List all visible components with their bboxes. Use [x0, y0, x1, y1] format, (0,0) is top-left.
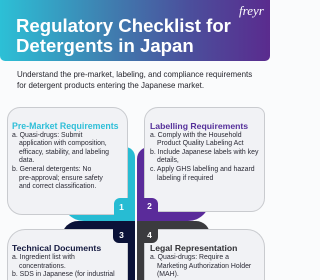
list [12, 132, 109, 190]
header banner [0, 0, 270, 61]
list: (MAH). [157, 271, 179, 278]
panel: pre-market requirements [7, 107, 135, 221]
list: efficacy, stability, and labeling [19, 149, 109, 156]
number 2 [143, 198, 158, 213]
list: application with composition, [19, 140, 107, 147]
list: a. Ingredient list with [12, 254, 75, 261]
list: a. Quasi-drugs: Submit [12, 132, 82, 138]
logo: freyr [239, 3, 264, 18]
card [144, 229, 265, 280]
card [7, 229, 128, 280]
teal backing shape [62, 147, 135, 221]
list [150, 254, 252, 278]
list: b. Include Japanese labels with key [150, 149, 258, 156]
list: a. Comply with the Household [150, 132, 242, 138]
card [144, 107, 265, 212]
number 3: 3 [119, 230, 124, 240]
title: Detergents in Japan [16, 35, 194, 56]
list [150, 132, 258, 182]
number 1: 1 [119, 202, 124, 212]
list: b. General detergents: No [12, 166, 91, 173]
list [12, 254, 115, 278]
title: Regulatory Checklist for [16, 15, 231, 36]
number 1 [114, 198, 129, 216]
intro text [17, 70, 252, 90]
number 2: 2 [147, 201, 152, 211]
list: b. SDS in Japanese (for industrial [12, 271, 115, 278]
number 4: 4 [147, 230, 152, 240]
intro text: for detergent products entering the Japanese market. [17, 80, 204, 90]
list: a. Quasi-drugs: Require a [150, 254, 229, 261]
list: data. [19, 157, 34, 164]
list: Product Quality Labeling Act [157, 140, 244, 147]
navy backing shape [62, 221, 135, 280]
title [16, 15, 231, 56]
number 3 [113, 228, 129, 243]
list: labeling if required [157, 175, 213, 182]
panel: technical documents [7, 221, 135, 280]
heading: Technical Documents [12, 242, 101, 252]
list: pre-approval; ensure safety [19, 175, 103, 182]
heading: Labelling Requirements [150, 121, 248, 131]
list: and correct classification. [19, 183, 96, 190]
list: concentrations. [19, 263, 66, 270]
list: c. Apply GHS labelling and hazard [150, 166, 255, 173]
panel: legal representation [137, 221, 265, 280]
card [7, 107, 128, 215]
grey backing shape [137, 221, 210, 280]
list: details, [157, 157, 179, 164]
list: Marketing Authorization Holder [157, 263, 251, 270]
panel: labelling requirements [137, 107, 265, 221]
heading: Pre-Market Requirements [12, 121, 119, 131]
intro text: Understand the pre-market, labeling, and compliance requirements [17, 70, 252, 78]
purple backing shape [137, 147, 210, 221]
number 4 [143, 228, 158, 243]
heading: Legal Representation [150, 242, 237, 252]
